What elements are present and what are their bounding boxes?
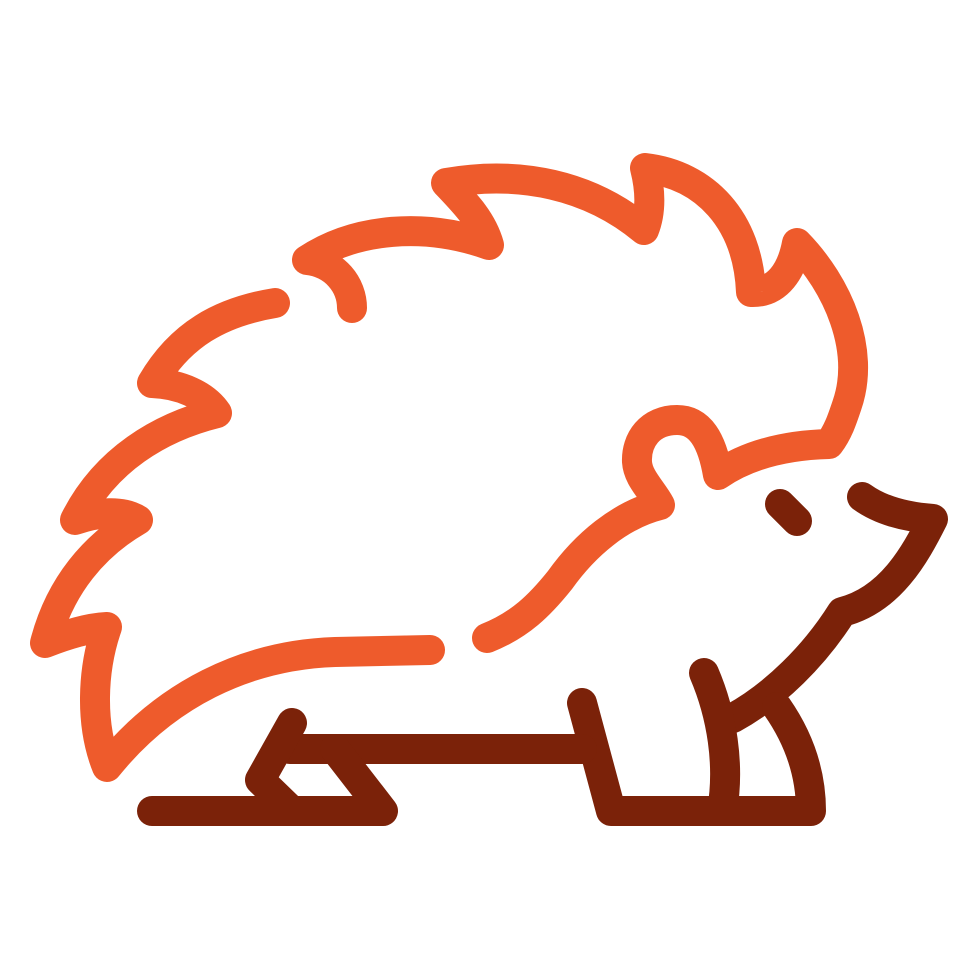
hind leg and foot <box>260 723 292 811</box>
eye <box>780 504 797 521</box>
snout and throat <box>733 497 933 718</box>
spines outline: orange back and quills <box>45 168 853 767</box>
front legs <box>704 673 725 811</box>
belly <box>290 734 582 764</box>
body: dark brown face, legs and ground <box>152 497 933 811</box>
